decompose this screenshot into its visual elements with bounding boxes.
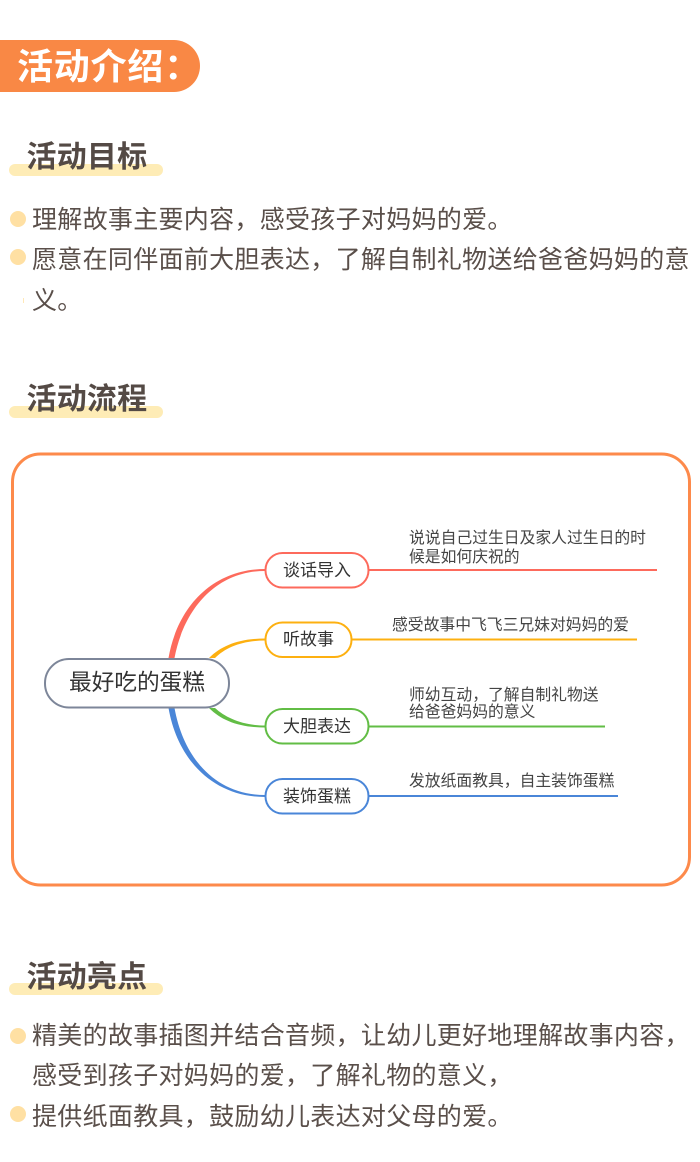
highlight 1 text: 感受到孩子对妈妈的爱，了解礼物的意义， <box>32 1062 513 1090</box>
note: bold expression <box>409 686 599 721</box>
bullet dot 1 <box>10 1028 26 1044</box>
branch: red <box>168 569 657 658</box>
central node <box>45 659 229 708</box>
panel: mind map <box>11 452 691 886</box>
heading: activity highlights: 活动亮点 <box>26 961 147 994</box>
heading: activity goals: 活动目标 <box>26 141 147 174</box>
bullet list: goals <box>10 206 690 315</box>
node: decorate cake <box>266 779 368 814</box>
note: decorate cake: 发放纸面教具，自主装饰蛋糕 <box>409 772 615 790</box>
branch: blue <box>168 708 618 797</box>
goal 2 text: 义。 <box>32 287 83 315</box>
note: talk intro <box>409 529 646 566</box>
highlight 2 text: 提供纸面教具，鼓励幼儿表达对父母的爱。 <box>32 1103 513 1131</box>
note: talk intro: 说说自己过生日及家人过生日的时 <box>409 529 646 547</box>
node: decorate cake: 装饰蛋糕 <box>283 787 351 806</box>
node: talk intro: 谈话导入 <box>283 561 351 580</box>
node: listen story <box>266 622 352 657</box>
goal 2 text <box>32 246 690 315</box>
bullet dot 2 <box>10 1106 26 1122</box>
stray mark <box>23 298 24 303</box>
central node: 最好吃的蛋糕 <box>69 669 205 695</box>
goal 1 text: 理解故事主要内容，感受孩子对妈妈的爱。 <box>32 206 513 234</box>
note: bold expression: 师幼互动，了解自制礼物送 <box>409 686 599 704</box>
node: listen story: 听故事 <box>283 630 334 649</box>
note: talk intro: 候是如何庆祝的 <box>409 548 520 566</box>
node: bold expression: 大胆表达 <box>283 717 351 736</box>
note: bold expression: 给爸爸妈妈的意义 <box>409 702 536 721</box>
heading: activity process: 活动流程 <box>26 383 147 416</box>
branch: green <box>209 708 605 728</box>
bullet list: highlights <box>10 1022 690 1131</box>
highlight 1 text: 精美的故事插图并结合音频，让幼儿更好地理解故事内容， <box>32 1022 690 1050</box>
bullet dot 1 <box>10 211 26 227</box>
node: bold expression <box>266 709 368 744</box>
branch: yellow <box>209 638 637 658</box>
highlight 1 text <box>32 1022 690 1090</box>
goal 2 text: 愿意在同伴面前大胆表达，了解自制礼物送给爸爸妈妈的意 <box>32 246 690 274</box>
node: talk intro <box>266 553 368 588</box>
bullet dot 2 <box>10 249 26 265</box>
title text: 活动介绍： <box>17 46 201 87</box>
note: listen story: 感受故事中飞飞三兄妹对妈妈的爱 <box>392 616 629 634</box>
title banner <box>0 40 200 92</box>
